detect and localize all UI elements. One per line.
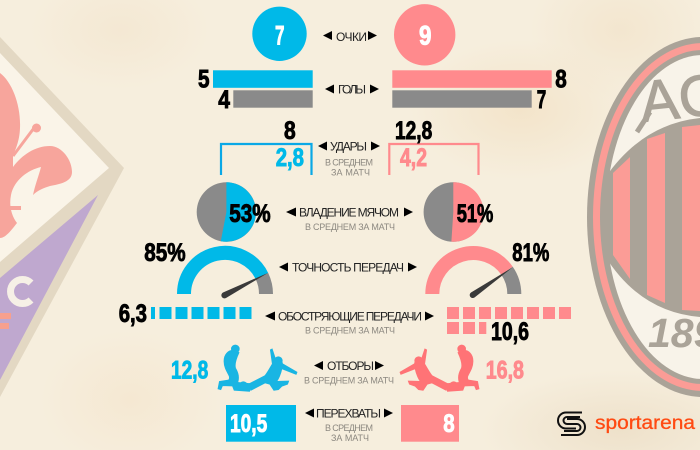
pink interceptions box: 8 bbox=[443, 410, 455, 438]
logo: Fiorentina crest bbox=[0, 37, 124, 397]
blue key pass squares: 6,3 bbox=[119, 300, 147, 328]
pink key pass squares: 10,6 bbox=[491, 318, 529, 346]
pink goal bars: 7 bbox=[537, 86, 546, 114]
accuracy label: ТОЧНОСТЬ ПЕРЕДАЧ bbox=[292, 260, 404, 274]
pink points circle bbox=[394, 4, 455, 66]
row: points bbox=[252, 4, 455, 66]
row: possession bbox=[197, 182, 493, 242]
sportarena wordmark: sportarena bbox=[595, 413, 695, 434]
logo: AC Milan crest bbox=[587, 37, 700, 397]
shots label: В СРЕДНЕМ bbox=[325, 158, 373, 168]
pink points circle: 9 bbox=[419, 20, 432, 50]
blue goal bars: 4 bbox=[218, 86, 230, 114]
pink shots bracket: 4,2 bbox=[400, 144, 427, 172]
blue interceptions box: 10,5 bbox=[230, 410, 267, 438]
points label bbox=[323, 30, 377, 44]
pink tackles value: 16,8 bbox=[486, 356, 524, 384]
pink goal bars: 8 bbox=[555, 65, 567, 93]
row: shots bbox=[221, 117, 478, 178]
blue points circle bbox=[252, 7, 307, 61]
blue possession pie: 53% bbox=[229, 200, 271, 228]
row: pass accuracy bbox=[144, 239, 549, 298]
possession label: ВЛАДЕНИЕ МЯЧОМ bbox=[299, 206, 399, 220]
blue points circle: 7 bbox=[275, 20, 284, 50]
blue shots bracket: 2,8 bbox=[276, 144, 304, 172]
possession label: В СРЕДНЕМ ЗА МАТЧ bbox=[305, 222, 395, 232]
row: goals bbox=[198, 65, 567, 114]
tackles label bbox=[304, 359, 394, 386]
blue accuracy gauge: 85% bbox=[144, 239, 186, 267]
pink shots bracket bbox=[389, 117, 478, 175]
shots label: УДАРЫ bbox=[330, 140, 367, 154]
interceptions label: ЗА МАТЧ bbox=[331, 433, 369, 443]
row: interceptions bbox=[226, 405, 459, 443]
points label: ОЧКИ bbox=[336, 30, 367, 44]
pink key pass squares bbox=[447, 307, 571, 346]
blue interceptions box bbox=[226, 405, 296, 442]
blue shots bracket: 8 bbox=[284, 117, 296, 145]
shots label bbox=[318, 140, 380, 178]
goals label bbox=[325, 82, 379, 96]
tackles label: ОТБОРЫ bbox=[327, 359, 374, 373]
logo: sportarena bbox=[558, 412, 695, 435]
key passes label: В СРЕДНЕМ ЗА МАТЧ bbox=[305, 326, 395, 336]
blue goal bars bbox=[198, 65, 313, 114]
blue accuracy gauge bbox=[144, 239, 268, 298]
blue goal bars: 5 bbox=[198, 65, 210, 93]
interceptions label: В СРЕДНЕМ bbox=[325, 423, 373, 433]
shots label: ЗА МАТЧ bbox=[331, 168, 370, 178]
pink accuracy gauge bbox=[432, 239, 549, 298]
icon: pink tackling players bbox=[400, 345, 479, 391]
blue possession pie bbox=[197, 182, 271, 242]
blue tackles value: 12,8 bbox=[171, 356, 208, 384]
pink possession pie bbox=[424, 182, 493, 242]
pink possession pie: 51% bbox=[457, 200, 493, 228]
tackles label: В СРЕДНЕМ ЗА МАТЧ bbox=[304, 376, 394, 386]
interceptions label bbox=[305, 406, 393, 443]
row: key passes bbox=[119, 300, 571, 346]
key passes label: ОБОСТРЯЮЩИЕ ПЕРЕДАЧИ bbox=[278, 310, 422, 324]
pink goal bars bbox=[392, 65, 567, 114]
key passes label bbox=[265, 310, 434, 336]
pink shots bracket: 12,8 bbox=[395, 117, 432, 145]
pink accuracy gauge: 81% bbox=[512, 239, 549, 267]
blue shots bracket bbox=[221, 117, 312, 175]
interceptions label: ПЕРЕХВАТЫ bbox=[316, 406, 381, 420]
icon: blue tackling players bbox=[218, 345, 297, 391]
possession label bbox=[286, 206, 413, 232]
pink interceptions box bbox=[401, 405, 459, 442]
row: tackles bbox=[171, 345, 524, 391]
icon: sportarena S mark bbox=[558, 412, 585, 435]
goals label: ГОЛЫ bbox=[338, 82, 366, 96]
blue key pass squares bbox=[119, 300, 252, 328]
